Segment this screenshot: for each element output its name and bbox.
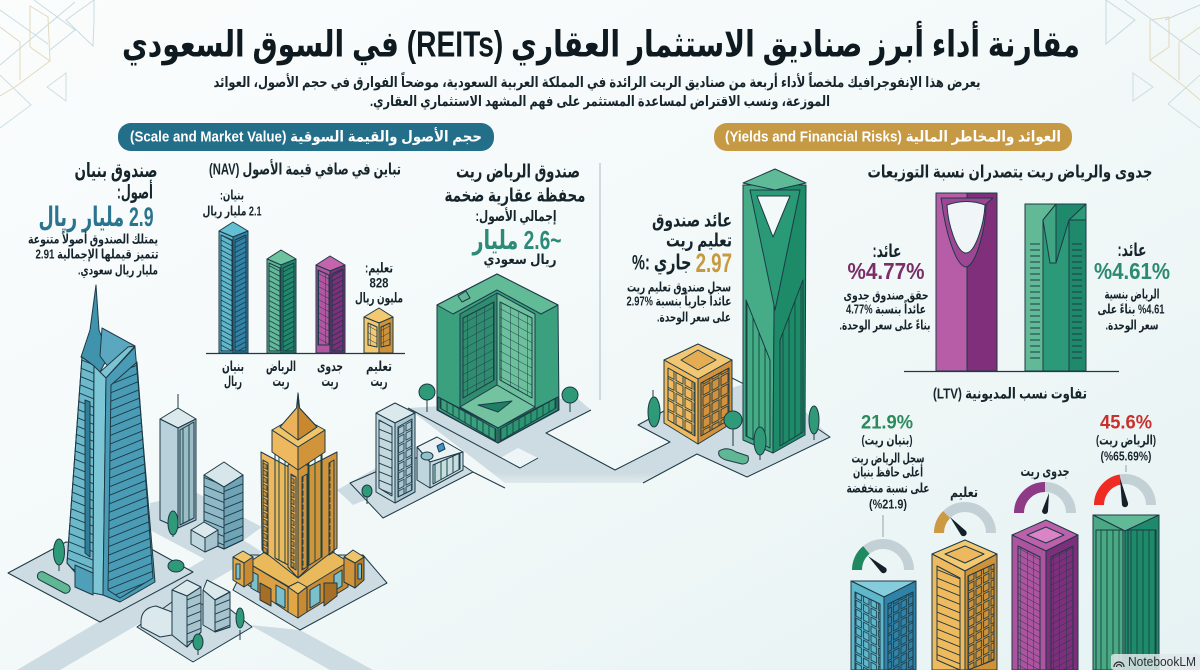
LTV: Bunyan: سجل الرياض ريت [852,450,924,466]
LTV: Bunyan: أعلى حافظ بنيان [853,464,923,480]
description: سجل صندوق تعليم ريت [627,280,731,294]
building: Taleem gold block [664,344,732,444]
bar: Riyad [267,250,296,353]
axis labels: ريت [272,373,290,389]
tower: Jadwa purple [936,193,997,371]
label: Saudi riyal: ريال سعودي [484,251,556,269]
bar label: Bunyan value: بنيان: [220,188,244,202]
bar label: Bunyan value [202,188,262,218]
description [28,230,158,278]
badge: NotebookLM [1111,654,1200,670]
column divider [599,163,601,400]
heading: Riyad REIT: صندوق الرياض ريت [456,160,580,182]
callout: Jadwa yield: عائداً بنسبة %4.77 [846,300,926,316]
chart: NAV bars [202,160,405,389]
panel: LTV gauges [846,386,1159,670]
bar: Taleem [364,308,393,353]
heading: Taleem yield [652,210,732,252]
bar: Bunyan [219,222,248,353]
axis labels: بنيان [222,358,244,374]
stat: 2.97: 2.97 جاري :% [632,248,732,278]
panel: dividend yields [840,162,1170,372]
heading: Taleem yield: عائد صندوق [652,210,732,232]
tower: Bunyan LTV [851,581,916,670]
building: light low-rise cluster [141,580,230,647]
roof cap [272,430,298,470]
callout: Jadwa yield: %4.77% [848,258,924,284]
bar value: Taleem: مليون ريال [355,290,403,306]
intro text: يعرض هذا الإنفوجرافيك ملخصاً لأداء أربعة من صناديق الريت الرائدة في المملكة العربية السعودية، موضحاً الفوارق في حجم الأصول، العوائد [214,72,980,91]
heading: Bunyan: صندوق بنيان [74,160,158,182]
callout: Riyad yield [1094,240,1170,332]
axis labels: الرياض [266,358,296,375]
description: عائداً جارياً بنسبة %2.97 [626,292,732,308]
section pill: yields and financial risks [714,123,1072,151]
tower body [261,452,298,578]
LTV: Jadwa [1019,463,1071,514]
city ground and roads [8,375,830,670]
building: Riyad green block [437,274,559,443]
panel: Riyad fund [444,160,586,269]
callout: Jadwa yield [840,241,930,332]
axis labels: ريت [370,373,388,389]
intro text: الموزعة، ونسب الاقتراض لمساعدة المستثمر على فهم المشهد الاستثماري العقاري. [370,94,830,111]
LTV: Taleem [939,484,991,536]
decoration: top-left geometric lines [0,0,94,128]
callout: Jadwa yield: عائد: [872,241,902,261]
bar: Jadwa [316,256,345,353]
callout: Riyad yield: الرياض بنسية [1104,286,1160,302]
tower: Riyad green [1025,204,1086,371]
LTV: Jadwa: جدوى ريت [1020,463,1070,480]
bar value: Taleem: تعليم: [365,260,393,276]
slab walls [248,563,288,612]
callout: Jadwa yield: حقق صندوق جدوى [844,288,928,302]
heading: Riyad REIT [444,160,586,206]
LTV: Riyad: 45.6% [1100,412,1152,434]
badge: NotebookLM: NotebookLM [1128,655,1196,669]
building: light tower near road [376,403,415,503]
description: على سعر الوحدة. [657,310,731,324]
description [626,280,732,324]
building: Taleem gold landmark tower [233,393,364,618]
axis labels [222,358,392,389]
LTV: Taleem: تعليم [950,484,978,500]
building: Kingdom-style green tower [743,169,806,453]
section pill: yields and financial risks: العوائد والمخاطر المالية (Yields and Financial Risks) [725,128,1061,146]
stat: 2.9 billion: 2.9 مليار ريال [38,202,154,233]
building: low utility block [417,437,463,488]
stat: 2.6 billion: ~2.6 مليار [471,225,562,255]
LTV: Bunyan: (%21.9) [869,496,907,512]
label: total assets: إجمالي الأصول: [476,207,556,225]
section pill: scale and market value: حجم الأصول والقيمة السوقية (Scale and Market Value) [130,128,482,146]
callout: Riyad yield: %4.61% [1094,258,1170,284]
tower: Jadwa LTV [1012,520,1078,670]
bar value: Taleem: 828 [370,276,389,290]
tower: Riyad LTV [1093,515,1159,670]
trees [36,384,819,655]
axis labels: تعليم [366,358,392,374]
section pill: scale and market value [118,123,494,151]
LTV: Bunyan: (بنيان ريت) [862,432,912,448]
chart heading: تباين في صافي قيمة الأصول (NAV) [209,160,401,180]
LTV: Bunyan [846,412,930,573]
callout: Riyad yield: سعر الوحدة. [1106,318,1158,332]
LTV: Riyad: (الرياض ريت) [1096,432,1156,448]
label: assets: أصول: [117,180,153,204]
building: Bunyan blue tower [67,285,155,602]
corner pavilions [233,551,253,563]
decoration: top-right geometric lines [1106,0,1200,128]
bar label: Bunyan value: 2.1 مليار ريال [202,204,262,218]
axis labels: جدوى [317,358,343,375]
LTV: Riyad: (%65.69%) [1100,448,1152,464]
panel: Bunyan fund [28,160,158,278]
heading: Taleem yield: تعليم ريت [666,230,732,252]
intro text [214,72,980,111]
heading: Riyad REIT: محفظة عقارية ضخمة [444,184,586,206]
LTV: Riyad [1096,412,1156,507]
building: light tower with antenna [160,394,196,528]
bar value: Taleem [355,260,403,306]
panel: Taleem yield [626,210,732,324]
LTV: Bunyan: 21.9% [861,412,913,434]
axis labels: ريت [322,373,338,389]
LTV: Bunyan: على نسبة منخفضة [846,480,930,496]
tower: Taleem LTV [932,540,997,670]
heading: LTV: تفاوت نسب المديونية (LTV) [933,386,1087,402]
building: light cube tower [191,462,243,552]
callout: Jadwa yield: بناءً على سعر الوحدة. [840,318,930,332]
description: مليار ريال سعودي. [78,262,158,278]
slab top [248,530,350,592]
callout: Riyad yield: %4.61 بناءً على [1098,302,1164,316]
axis labels: ريال [224,373,242,389]
callout: Riyad yield: عائد: [1118,240,1146,260]
description: تتميز قيملها الإجمالية 2.91 [36,246,158,262]
description: يمتلك الصندوق أصولاً متنوعة [28,230,158,246]
